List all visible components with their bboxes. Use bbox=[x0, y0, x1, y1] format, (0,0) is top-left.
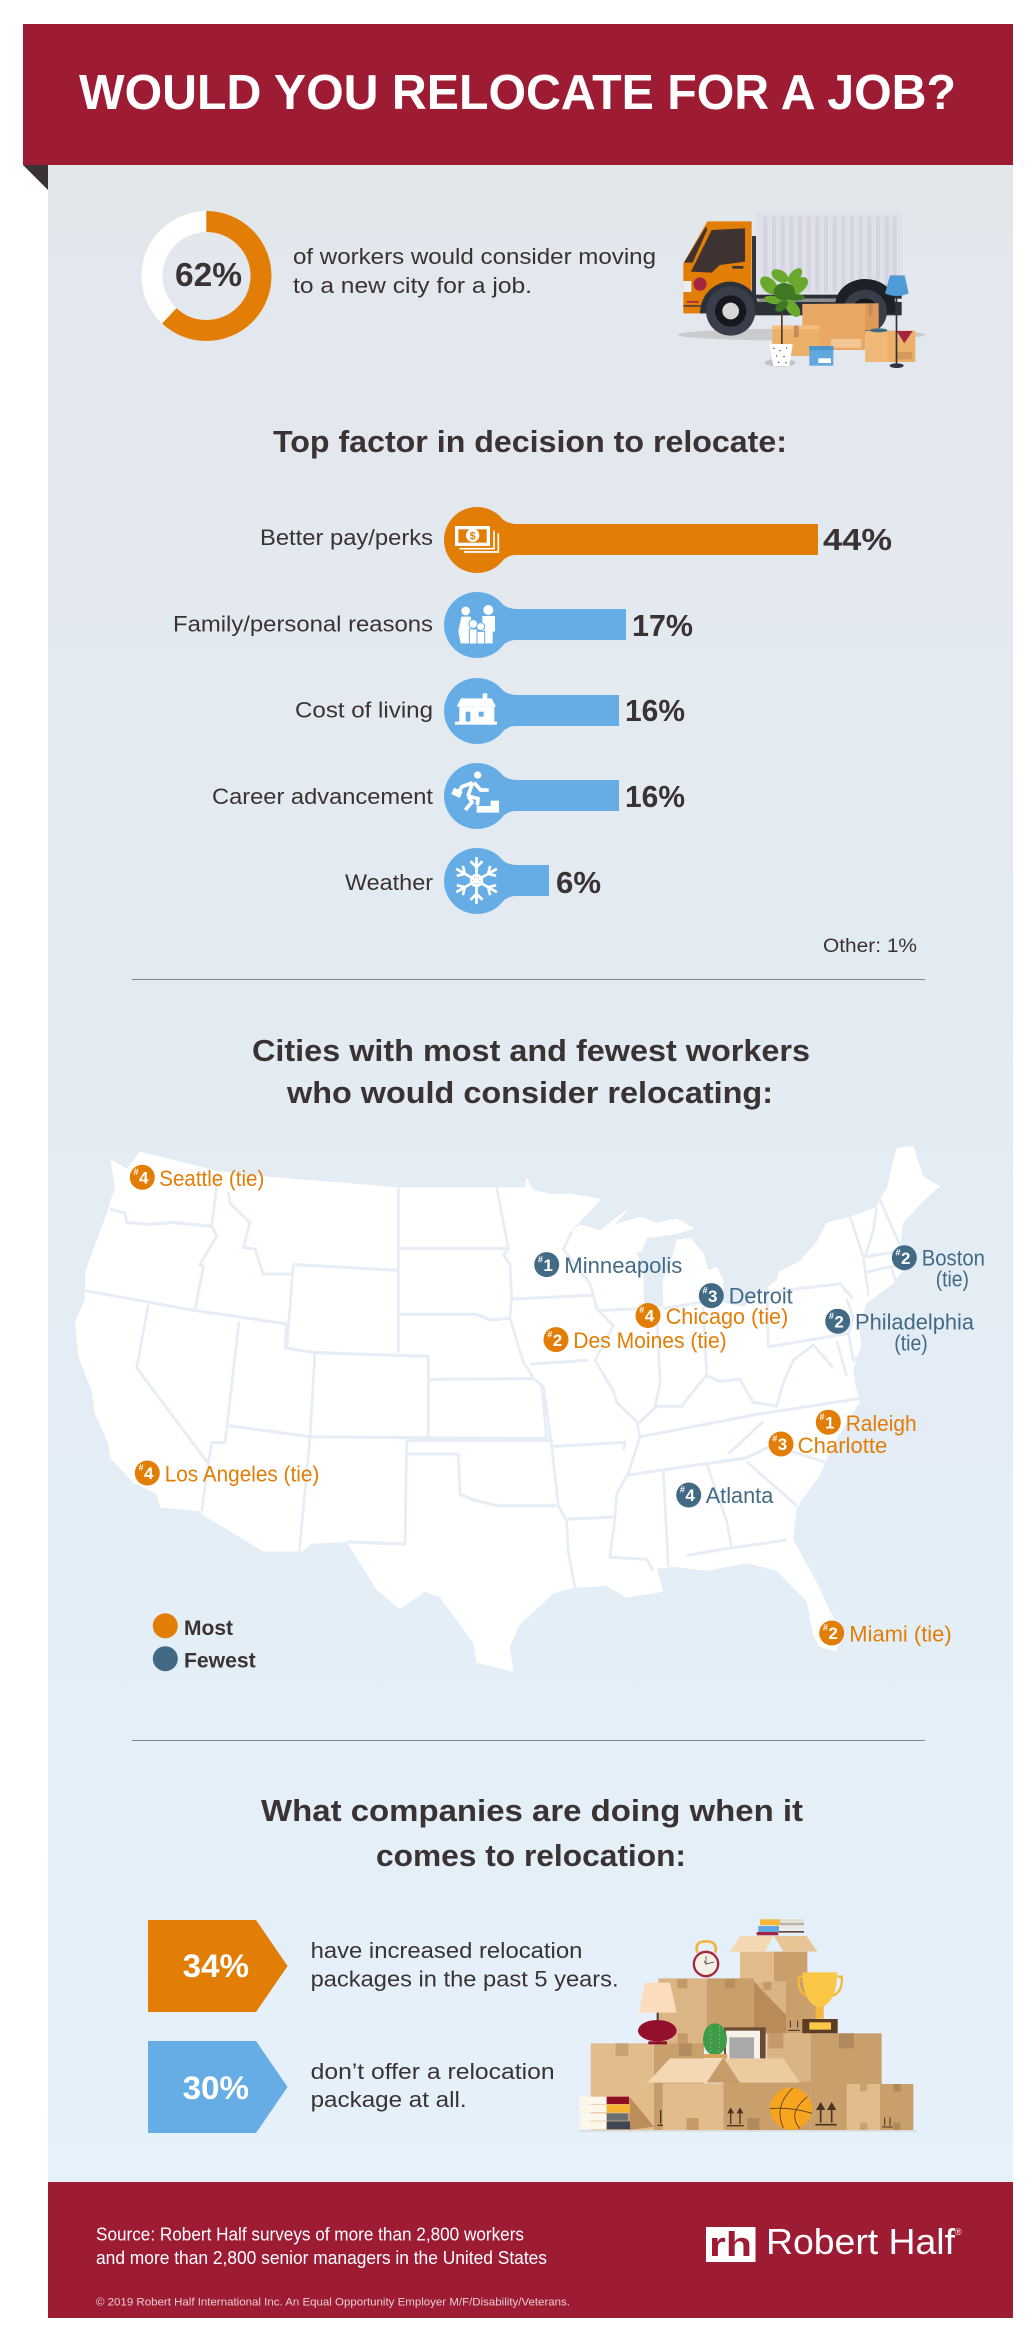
intro text bbox=[293, 244, 656, 298]
city: Boston bbox=[892, 1245, 985, 1291]
map legend bbox=[153, 1613, 256, 1672]
bar chart: top factors bbox=[173, 507, 892, 914]
intro text: to a new city for a job. bbox=[293, 273, 532, 298]
city: Los Angeles: # bbox=[138, 1463, 144, 1473]
city: Boston: (tie) bbox=[936, 1266, 969, 1291]
city: Atlanta: # bbox=[680, 1485, 685, 1495]
row: family/personal reasons bbox=[173, 592, 693, 658]
logo: Robert Half: ® bbox=[955, 2227, 962, 2237]
logo: Robert Half bbox=[706, 2221, 962, 2264]
city: Philadelphia bbox=[825, 1309, 975, 1356]
city: Raleigh: # bbox=[820, 1412, 825, 1422]
city: Des Moines: # bbox=[547, 1329, 552, 1339]
city: Seattle: 4 bbox=[139, 1168, 149, 1188]
row: cost of living bbox=[295, 678, 685, 744]
row: better pay/perks: Better pay/perks bbox=[260, 525, 433, 550]
heading: cities bbox=[252, 1033, 810, 1110]
logo: Robert Half: Robert Half bbox=[766, 2221, 956, 2262]
logo: Robert Half: rh bbox=[709, 2226, 752, 2264]
city: Des Moines: 2 bbox=[553, 1331, 562, 1350]
donut chart: 62% bbox=[152, 222, 261, 330]
city: Detroit: 3 bbox=[708, 1287, 717, 1306]
city: Charlotte: 3 bbox=[778, 1435, 787, 1454]
city: Raleigh bbox=[816, 1410, 917, 1436]
city: Detroit: Detroit bbox=[729, 1284, 793, 1309]
city: Los Angeles: Los Angeles (tie) bbox=[165, 1462, 319, 1486]
heading: companies: What companies are doing when it bbox=[261, 1793, 803, 1828]
city: Minneapolis: 1 bbox=[543, 1256, 553, 1275]
city: Detroit bbox=[699, 1283, 793, 1309]
heading: companies bbox=[261, 1793, 803, 1873]
city: Charlotte: Charlotte bbox=[798, 1433, 887, 1458]
row: better pay/perks bbox=[260, 507, 892, 573]
row: cost of living: 16% bbox=[625, 693, 685, 728]
city: Raleigh: 1 bbox=[825, 1413, 834, 1432]
footer band bbox=[48, 2182, 1013, 2318]
heading: top factor: Top factor in decision to relocate: bbox=[273, 424, 787, 459]
source text bbox=[96, 2225, 547, 2268]
heading: cities: Cities with most and fewest workers bbox=[252, 1033, 810, 1068]
row: family/personal reasons: Family/personal reasons bbox=[173, 612, 433, 636]
stat: 30%: don’t offer a relocation bbox=[311, 2059, 555, 2084]
city: Miami: Miami (tie) bbox=[849, 1622, 952, 1646]
heading: companies: comes to relocation: bbox=[376, 1838, 686, 1873]
source text: and more than 2,800 senior managers in the United States bbox=[96, 2248, 547, 2268]
row: weather: Weather bbox=[345, 870, 433, 895]
icon: stack of moving boxes bbox=[578, 1919, 917, 2132]
city: Boston: # bbox=[896, 1247, 901, 1257]
city: Los Angeles: 4 bbox=[144, 1464, 154, 1483]
row: better pay/perks: $ bbox=[470, 530, 476, 542]
note: other 1%: Other: 1% bbox=[823, 936, 917, 957]
stat: 30%: package at all. bbox=[311, 2087, 467, 2112]
map legend: Most bbox=[184, 1617, 233, 1640]
row: career advancement: 16% bbox=[625, 779, 685, 814]
city: Philadelphia: # bbox=[829, 1311, 834, 1321]
city: Raleigh: Raleigh bbox=[846, 1411, 917, 1436]
city: Philadelphia: 2 bbox=[834, 1312, 844, 1331]
US map bbox=[75, 1146, 940, 1672]
stat: 30% bbox=[148, 2041, 555, 2133]
city: Charlotte: # bbox=[772, 1434, 777, 1444]
stat: 34%: 34% bbox=[183, 1948, 249, 1984]
city: Miami: # bbox=[823, 1623, 828, 1633]
city: Minneapolis: # bbox=[538, 1254, 543, 1264]
city: Atlanta: Atlanta bbox=[706, 1483, 774, 1508]
city: Des Moines: Des Moines (tie) bbox=[573, 1328, 727, 1353]
city: Detroit: # bbox=[702, 1285, 708, 1295]
icon: moving truck with boxes bbox=[678, 213, 926, 368]
city: Boston: Boston bbox=[922, 1246, 985, 1271]
city: Chicago: Chicago (tie) bbox=[666, 1304, 788, 1329]
copyright: © 2019 Robert Half International Inc. An Equal Opportunity Employer M/F/Disability/Veterans. bbox=[96, 2297, 570, 2309]
city: Seattle: Seattle (tie) bbox=[159, 1166, 264, 1191]
row: career advancement: Career advancement bbox=[212, 784, 433, 809]
donut chart: 62%: 62% bbox=[175, 256, 242, 293]
city: Atlanta: 4 bbox=[685, 1486, 695, 1505]
city: Boston: 2 bbox=[901, 1249, 910, 1268]
source text: Source: Robert Half surveys of more than 2,800 workers bbox=[96, 2225, 524, 2245]
city: Chicago: # bbox=[639, 1305, 644, 1315]
stat: 34%: packages in the past 5 years. bbox=[311, 1967, 619, 1992]
stat: 34%: have increased relocation bbox=[311, 1938, 582, 1963]
row: career advancement bbox=[212, 763, 685, 829]
city: Miami: 2 bbox=[828, 1624, 838, 1643]
row: family/personal reasons: 17% bbox=[632, 608, 693, 643]
city: Philadelphia: (tie) bbox=[894, 1331, 928, 1356]
intro text: of workers would consider moving bbox=[293, 244, 656, 269]
row: weather: 6% bbox=[556, 865, 601, 900]
row: better pay/perks: 44% bbox=[823, 522, 892, 557]
city: Minneapolis: Minneapolis bbox=[564, 1253, 682, 1278]
title banner: WOULD YOU RELOCATE FOR A JOB? bbox=[79, 66, 956, 120]
title banner bbox=[23, 24, 1013, 190]
city: Philadelphia: Philadelphia bbox=[855, 1310, 975, 1335]
row: weather bbox=[345, 848, 601, 914]
stat: 34% bbox=[148, 1920, 619, 2012]
stat: 30%: 30% bbox=[183, 2070, 249, 2106]
row: cost of living: Cost of living bbox=[295, 698, 433, 722]
city: Seattle: # bbox=[134, 1167, 139, 1177]
heading: cities: who would consider relocating: bbox=[286, 1075, 773, 1110]
map legend: Fewest bbox=[184, 1650, 256, 1672]
city: Atlanta bbox=[676, 1482, 774, 1508]
city: Chicago: 4 bbox=[645, 1307, 655, 1326]
